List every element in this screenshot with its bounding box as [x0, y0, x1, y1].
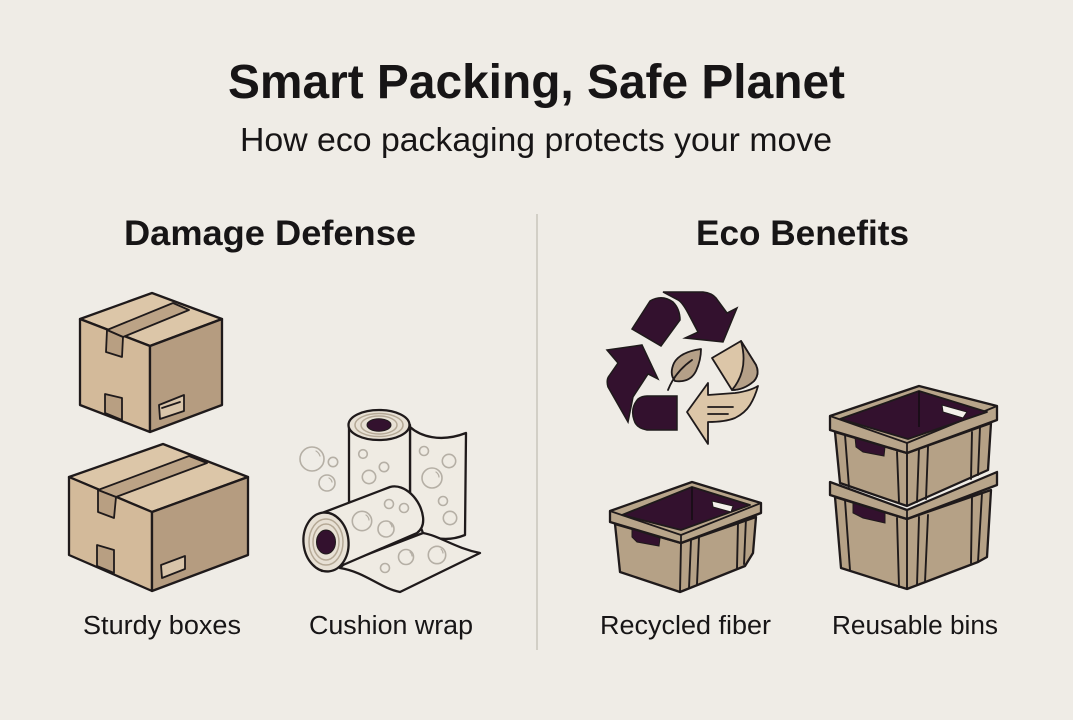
- icon: cushion wrap rolls: [300, 410, 480, 592]
- icon: recycling symbol: [607, 292, 758, 444]
- label: Recycled fiber: Recycled fiber: [600, 610, 771, 640]
- label: Reusable bins: Reusable bins: [832, 610, 998, 640]
- subtitle: How eco packaging protects your move: [240, 121, 832, 158]
- heading: Eco Benefits: Eco Benefits: [696, 213, 909, 253]
- icon: stacked reusable bins: [830, 386, 997, 589]
- icon: large cardboard box: [69, 444, 248, 591]
- label: Cushion wrap: Cushion wrap: [309, 610, 473, 640]
- icon: recycled fiber bin: [610, 482, 761, 592]
- title: Smart Packing, Safe Planet: [228, 56, 845, 109]
- heading: Damage Defense: Damage Defense: [124, 213, 416, 253]
- label: Sturdy boxes: Sturdy boxes: [83, 610, 241, 640]
- icon: small cardboard box: [80, 293, 222, 432]
